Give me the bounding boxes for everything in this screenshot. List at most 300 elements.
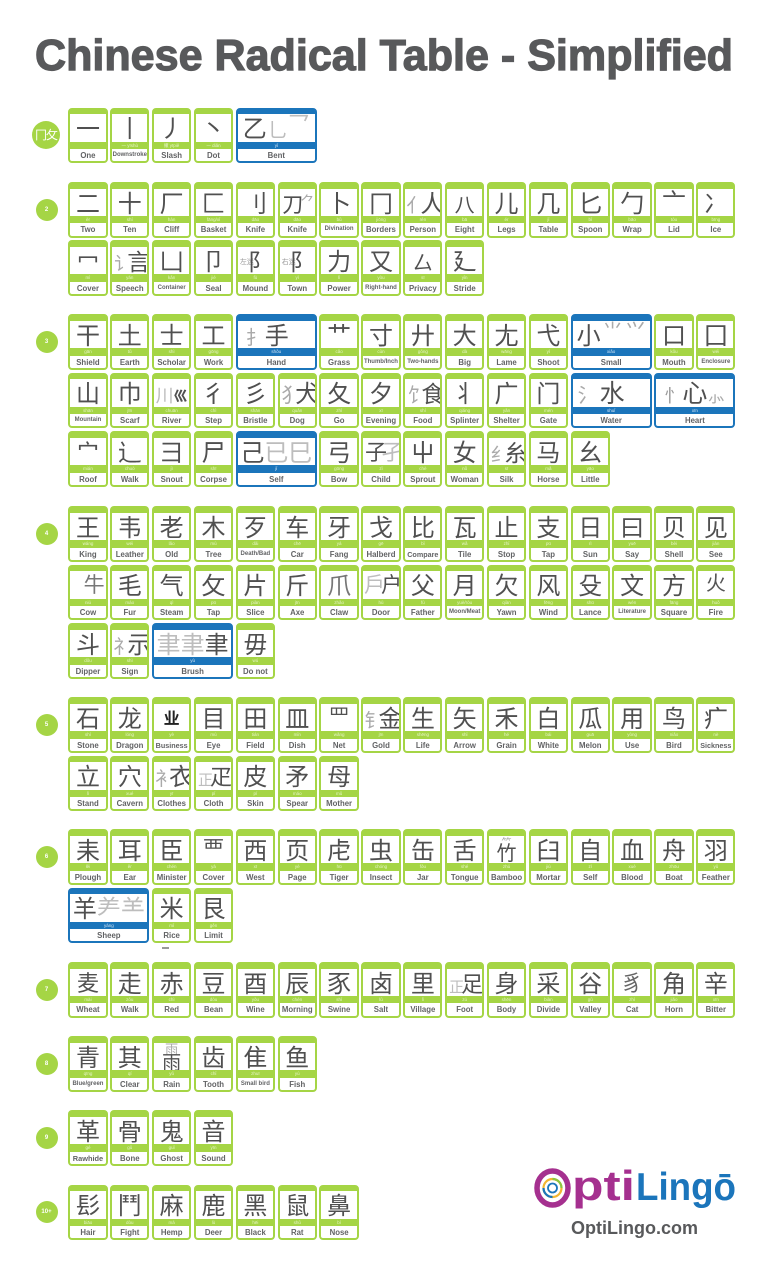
radical card: Eight: bā (462, 217, 467, 222)
radical card: Blood: xuè (628, 864, 636, 869)
radical card: Life: shēng (417, 732, 429, 737)
radical card: Corpse (194, 431, 233, 487)
radical card: Leather (110, 506, 149, 562)
radical card: Business (152, 697, 191, 753)
radical card: Sign: Sign (121, 667, 138, 676)
radical card: Sound (194, 1110, 233, 1166)
radical card: Self: jǐ (275, 466, 277, 471)
radical card: Horn: Horn (665, 1005, 683, 1014)
radical card: Nose: bí (337, 1220, 341, 1225)
radical card: Small bird (236, 1036, 275, 1092)
radical card: Shoot: yì (547, 349, 550, 354)
radical card: Eye: mù (210, 732, 217, 737)
radical card: Fish (278, 1036, 317, 1092)
radical card: Jar: Jar (417, 873, 429, 882)
radical card: Bone (110, 1110, 149, 1166)
radical card: River: chuān (166, 408, 178, 413)
radical card: Fire: huǒ (712, 600, 720, 605)
radical card: Wheat (68, 962, 108, 1018)
radical card: Hemp: má (169, 1220, 175, 1225)
radical card: Cat (612, 962, 652, 1018)
radical card: Mountain: shān (83, 408, 93, 413)
stroke count badge: 2: 2 (45, 207, 48, 213)
radical card: Yawn: Yawn (497, 608, 516, 617)
radical card: Dish (278, 697, 317, 753)
radical card: Valley: Valley (579, 1005, 601, 1014)
stroke count badge: 2 (36, 199, 58, 221)
radical card: Foot: zú (462, 997, 467, 1002)
radical card: Two (68, 182, 108, 238)
radical card: Fish: Fish (289, 1080, 305, 1089)
radical card: Small bird: Small bird (241, 1081, 270, 1087)
radical card: Enclosure (696, 314, 735, 370)
radical card: Deer: Deer (205, 1228, 222, 1237)
stroke count badge: 5: 5 (45, 722, 48, 728)
radical card: Shelter: Shelter (493, 416, 520, 425)
radical card: Death/Bad: dǎi (252, 541, 258, 546)
radical card: Knife: Knife (246, 225, 265, 234)
radical card: Blue/green: qīng (84, 1071, 92, 1076)
radical card: Thumb/Inch (361, 314, 401, 370)
radical card: Page: Page (288, 873, 307, 882)
radical card: River (152, 373, 191, 428)
radical card: Snout: Snout (161, 475, 183, 484)
radical card: Claw (319, 565, 359, 620)
radical card: Axe: Axe (290, 608, 304, 617)
radical card: Car: Car (291, 550, 304, 559)
radical card: Tap: Tap (542, 550, 555, 559)
radical card: Stand: lì (87, 791, 89, 796)
radical card: Work: Work (204, 358, 223, 367)
radical card: Axe (278, 565, 317, 620)
radical card: Slice: Slice (246, 608, 264, 617)
radical card: Shelter (487, 373, 526, 428)
radical card: Fight: Fight (120, 1228, 139, 1237)
section: 7 strokes (36, 962, 735, 1018)
radical card: Eye: Eye (207, 741, 220, 750)
radical card: Divide: Divide (537, 1005, 560, 1014)
radical card: Cow (68, 565, 108, 620)
radical card: Skin: pí (254, 791, 257, 796)
radical card: Grain: Grain (496, 741, 517, 750)
radical card: Mountain (68, 373, 108, 428)
radical card: Stop: Stop (498, 550, 515, 559)
radical card: Dipper: dǒu (84, 658, 92, 663)
radical card: Sickness: nè (713, 732, 718, 737)
radical card: Lame: wāng (501, 349, 512, 354)
radical card: Privacy (403, 240, 442, 296)
radical card: Town (278, 240, 317, 296)
radical card: Deer (194, 1185, 233, 1240)
radical card: Wrap (612, 182, 652, 238)
radical card: Village (403, 962, 442, 1018)
radical card: Limit: gěn (210, 923, 217, 928)
radical card: Earth: tǔ (128, 349, 132, 354)
radical card: Rawhide: Rawhide (73, 1154, 103, 1163)
stroke count badge: 8: 8 (45, 1061, 48, 1067)
radical card: Eight (445, 182, 484, 238)
radical card: Shield: Shield (76, 358, 100, 367)
radical card: Bow: gōng (334, 466, 344, 471)
radical card: King: wáng (83, 541, 93, 546)
radical card: Roof (68, 431, 108, 487)
radical card: Stride: yǐn (462, 275, 468, 280)
radical card: Dog (278, 373, 317, 428)
radical card: Evening: xī (379, 408, 383, 413)
radical card: Leather: wéi (126, 541, 133, 546)
radical card: Door: Door (372, 608, 390, 617)
radical card: Stop: zhǐ (504, 541, 509, 546)
radical card: Right-hand: yòu (377, 275, 385, 280)
radical card: Hair: Hair (80, 1228, 96, 1237)
radical card: Snout: jì (171, 466, 173, 471)
radical card: Dog: quǎn (292, 408, 302, 413)
radical card: Scholar: Scholar (157, 358, 186, 367)
radical card: Cloth: pǐ (212, 791, 215, 796)
radical card: Stride: Stride (454, 284, 476, 293)
radical card: Hair (68, 1185, 108, 1240)
radical card: Thumb/Inch: Thumb/Inch (364, 359, 398, 365)
radical card: Mother: mǔ (336, 791, 342, 796)
radical card: Halberd (361, 506, 401, 562)
radical card: Plough: Plough (75, 873, 101, 882)
radical card: Deer: lù (212, 1220, 215, 1225)
radical card: Silk: Silk (500, 475, 513, 484)
radical card: Blood (612, 829, 652, 885)
radical card: Feather: Feather (702, 873, 730, 882)
radical card: Lance (571, 565, 610, 620)
radical card: Salt (361, 962, 401, 1018)
radical card: Sprout: chè (419, 466, 426, 471)
radical card: Claw: Claw (330, 608, 348, 617)
radical card: Bean (194, 962, 233, 1018)
stroke count badge: 1 (32, 121, 60, 149)
radical card: One (68, 108, 108, 163)
radical card: Divination: bǔ (337, 217, 342, 222)
radical card: Child (361, 431, 401, 487)
radical card: Gate: mén (544, 408, 553, 413)
radical card: Grain: hé (504, 732, 509, 737)
radical card: Container (152, 240, 191, 296)
radical card: Feather: yǔ (713, 864, 718, 869)
radical card: Brush: yù (190, 658, 195, 663)
radical card: West: West (246, 873, 265, 882)
radical card: Sprout: Sprout (410, 475, 435, 484)
radical card: Hand: shǒu (271, 349, 281, 354)
radical card: Mound: fù (254, 275, 257, 280)
radical card: Rain (152, 1036, 191, 1092)
radical card: Table: jǐ (547, 217, 549, 222)
radical card: Self: Self (583, 873, 597, 882)
section: 1 stroke (32, 108, 317, 163)
radical card: Table (529, 182, 568, 238)
radical card: Sun: rì (589, 541, 592, 546)
radical card: Sickness: Sickness (700, 741, 731, 750)
radical card: Salt: lǔ (379, 997, 383, 1002)
radical card: Cover: Cover (202, 873, 225, 882)
radical card: Bitter: xīn (713, 997, 719, 1002)
radical card: Field (236, 697, 275, 753)
radical card: Child: Child (371, 475, 391, 484)
radical card: Knife: dāo (252, 217, 259, 222)
radical card: Wrap: bāo (628, 217, 636, 222)
radical card: Stone (68, 697, 108, 753)
radical card: Scarf (110, 373, 149, 428)
radical card: Scholar (152, 314, 191, 370)
section: 9 strokes (36, 1110, 233, 1166)
radical card: Wind: fēng (544, 600, 553, 605)
stroke count badge: 6: 6 (45, 854, 48, 860)
radical card: Red (152, 962, 191, 1018)
radical card: Borders (361, 182, 401, 238)
radical card: Leather: Leather (116, 550, 144, 559)
radical card: Walk: zǒu (126, 997, 133, 1002)
radical card: Container: kǎn (168, 275, 175, 280)
radical card: Lid: Lid (668, 225, 680, 234)
radical card: Mouth: Mouth (662, 358, 686, 367)
radical card: Cloth: Cloth (204, 799, 223, 808)
radical card: Dot (194, 108, 233, 163)
radical card: Compare (403, 506, 442, 562)
radical card: Melon: Melon (579, 741, 602, 750)
radical card: Scholar: shì (169, 349, 175, 354)
radical card: Square: Square (661, 608, 687, 617)
radical card: Basket: fāng/xǐ (207, 217, 220, 222)
radical card: Dragon (110, 697, 149, 753)
radical card: Bean: dòu (210, 997, 217, 1002)
radical card: Woman: nǚ (462, 466, 467, 471)
logo: OptiLingo (534, 1162, 736, 1238)
radical card: Do not (236, 623, 275, 679)
radical card: Tap: pū (546, 541, 551, 546)
radical card: Dog: Dog (290, 416, 305, 425)
radical card: Tiger (319, 829, 359, 885)
radical card: Sickness (696, 697, 735, 753)
radical card: Shell: Shell (665, 550, 683, 559)
radical card: Power: Power (327, 284, 351, 293)
radical card: Fire: Fire (709, 608, 723, 617)
radical card: Tap (variant): Tap (207, 608, 220, 617)
radical card: Yawn (487, 565, 526, 620)
radical card: Dragon: lóng (126, 732, 134, 737)
title: Chinese Radical Table - Simplified (35, 31, 733, 80)
radical card: Horn (654, 962, 694, 1018)
radical card: Small bird: zhuī (251, 1071, 260, 1076)
radical card: Shield: gān (84, 349, 92, 354)
radical card: Town: 右迷 (282, 257, 296, 267)
radical card: Horse (529, 431, 568, 487)
radical card: Self: Self (269, 475, 283, 484)
radical card: Blood: Blood (621, 873, 643, 882)
radical card: Scarf: Scarf (120, 416, 140, 425)
radical card: Compare: Compare (407, 550, 438, 559)
radical card: Walk: chuò (125, 466, 135, 471)
radical card: Heart (654, 373, 735, 428)
radical card: King (68, 506, 108, 562)
radical card: Spoon: Spoon (578, 225, 602, 234)
radical card: Basket (194, 182, 233, 238)
radical card: Fish: yú (295, 1071, 300, 1076)
radical card: Stop (487, 506, 526, 562)
radical card: Cat: Cat (626, 1005, 638, 1014)
radical card: Literature: Literature (618, 609, 646, 615)
radical card: Shell: bèi (671, 541, 677, 546)
radical card: Knife (236, 182, 275, 238)
radical card: Ear: ěr (128, 864, 132, 869)
radical card: Compare: bǐ (421, 541, 425, 546)
radical card: Horse: mǎ (545, 466, 552, 471)
radical card: Town: yì (295, 275, 299, 280)
radical card: Square (654, 565, 694, 620)
stroke count badge: 7 (36, 979, 58, 1001)
radical card: Brush: Brush (181, 667, 204, 676)
radical card: Moon/Meat: Moon/Meat (449, 609, 480, 615)
radical card: Roof: mián (83, 466, 93, 471)
radical card: Self: zì (588, 864, 592, 869)
radical card: Spoon: bǐ (588, 217, 592, 222)
radical card: Valley (571, 962, 610, 1018)
section: 4 strokes (36, 506, 735, 679)
radical card: Rice (152, 888, 191, 943)
radical card: King: King (79, 550, 97, 559)
radical card: Mother (319, 756, 359, 811)
radical card: Father: fù (421, 600, 425, 605)
radical card: Town: Town (287, 284, 307, 293)
radical card: Arrow: shǐ (462, 732, 468, 737)
radical card: Lame: Lame (496, 358, 517, 367)
wordmark: pti (572, 1162, 635, 1209)
radical card: Limit (194, 888, 233, 943)
stroke count badge: 4: 4 (45, 531, 48, 537)
radical card: Wine: yǒu (252, 997, 259, 1002)
radical card: Tooth (194, 1036, 233, 1092)
radical card: Legs: Legs (497, 225, 516, 234)
radical card: Do not: Do not (243, 667, 268, 676)
radical card: Say: Say (625, 550, 639, 559)
radical card: Page (278, 829, 317, 885)
radical card: Divination (319, 182, 359, 238)
radical card: Swine: Swine (328, 1005, 350, 1014)
radical card: Water: Water (600, 416, 622, 425)
radical card: Rawhide (68, 1110, 108, 1166)
radical card: Sheep: yáng (104, 923, 114, 928)
radical card: Tile: wǎ (462, 541, 468, 546)
radical card: Corpse: shī (211, 466, 217, 471)
radical card: Dish: Dish (289, 741, 306, 750)
radical card: Literature: wén (628, 600, 636, 605)
radical card: Field: tián (252, 732, 259, 737)
radical card: Plough (68, 829, 108, 885)
radical card: Grass (319, 314, 359, 370)
radical card: Walk: Walk (121, 475, 139, 484)
radical card: Mortar (529, 829, 568, 885)
radical card: Say (612, 506, 652, 562)
radical card: Rat: shǔ (294, 1220, 301, 1225)
radical card: Fur (110, 565, 149, 620)
radical card: Black (236, 1185, 275, 1240)
radical card: Mouth: kǒu (670, 349, 678, 354)
radical card: Fire (696, 565, 735, 620)
stroke count badge: 7: 7 (45, 987, 48, 993)
radical card: Steam: Steam (160, 608, 183, 617)
radical card: Child: zǐ (379, 466, 383, 471)
radical card: Walk (110, 962, 149, 1018)
radical card: Walk: Walk (121, 1005, 139, 1014)
radical card: Black: hēi (252, 1220, 258, 1225)
stroke count badge: 1: 冂攵 (35, 126, 57, 143)
section: 5 strokes (36, 697, 735, 811)
radical card: Limit: Limit (204, 931, 223, 940)
radical card: Shelter: yǎn (503, 408, 510, 413)
radical card: Melon: guā (586, 732, 594, 737)
radical card: Dipper: Dipper (76, 667, 100, 676)
radical card: Rain: Rain (163, 1080, 180, 1089)
radical card: Ten (110, 182, 149, 238)
radical card: Food: shí (420, 408, 426, 413)
radical card: Borders: jiōng (376, 217, 386, 222)
radical card: Shell (654, 506, 694, 562)
radical card: Cat: zhì (629, 997, 635, 1002)
radical card: Wind: Wind (539, 608, 558, 617)
radical card: Water: shuǐ (607, 408, 615, 413)
radical card: Tongue (445, 829, 484, 885)
radical card: Shield (68, 314, 108, 370)
radical card: Insect: chóng (375, 864, 387, 869)
radical card: Nose: Nose (330, 1228, 349, 1237)
radical card: Insect: Insect (370, 873, 392, 882)
radical card: Bean: Bean (204, 1005, 223, 1014)
radical card: Swine: shǐ (336, 997, 342, 1002)
radical card: Fang (319, 506, 359, 562)
wordmark (572, 1162, 736, 1209)
radical card: Arrow (445, 697, 484, 753)
radical card: Bent: Bent (268, 151, 285, 160)
radical card: Tile: Tile (458, 550, 471, 559)
radical card: Clear: Clear (120, 1080, 140, 1089)
radical card: Death/Bad (236, 506, 275, 562)
stroke count badge: 6 (36, 846, 58, 868)
radical card: Rat (278, 1185, 317, 1240)
radical card: Tooth: Tooth (203, 1080, 224, 1089)
radical card: Hemp (152, 1185, 191, 1240)
radical card: Foot: Foot (456, 1005, 473, 1014)
radical card: Hemp: Hemp (161, 1228, 182, 1237)
radical card: Tile (445, 506, 484, 562)
radical card: Stride (445, 240, 484, 296)
website url: OptiLingo.com (571, 1218, 698, 1238)
stroke count badge: 10+: 10+ (41, 1209, 52, 1215)
radical card: Mound: Mound (243, 284, 268, 293)
radical card: Dragon: Dragon (116, 741, 143, 750)
radical card: Tongue: shé (461, 864, 468, 869)
radical card: Scarf: jīn (127, 408, 132, 413)
radical card: Cow: niú (85, 600, 91, 605)
radical card: Horse: Horse (537, 475, 559, 484)
radical card: Halberd: gē (378, 541, 383, 546)
radical card: See: jiàn (712, 541, 719, 546)
radical card: Bristle: Bristle (243, 416, 268, 425)
radical card: Slice (236, 565, 275, 620)
radical card: Tap (variant): pū (211, 600, 216, 605)
radical card: Step: Step (205, 416, 222, 425)
radical card: Old (152, 506, 191, 562)
radical card: Black: Black (245, 1228, 266, 1237)
radical card: Valley: gǔ (588, 997, 593, 1002)
radical card: Splinter (445, 373, 484, 428)
radical card: Moon/Meat (445, 565, 484, 620)
radical card: Net (319, 697, 359, 753)
radical card: Life (403, 697, 442, 753)
